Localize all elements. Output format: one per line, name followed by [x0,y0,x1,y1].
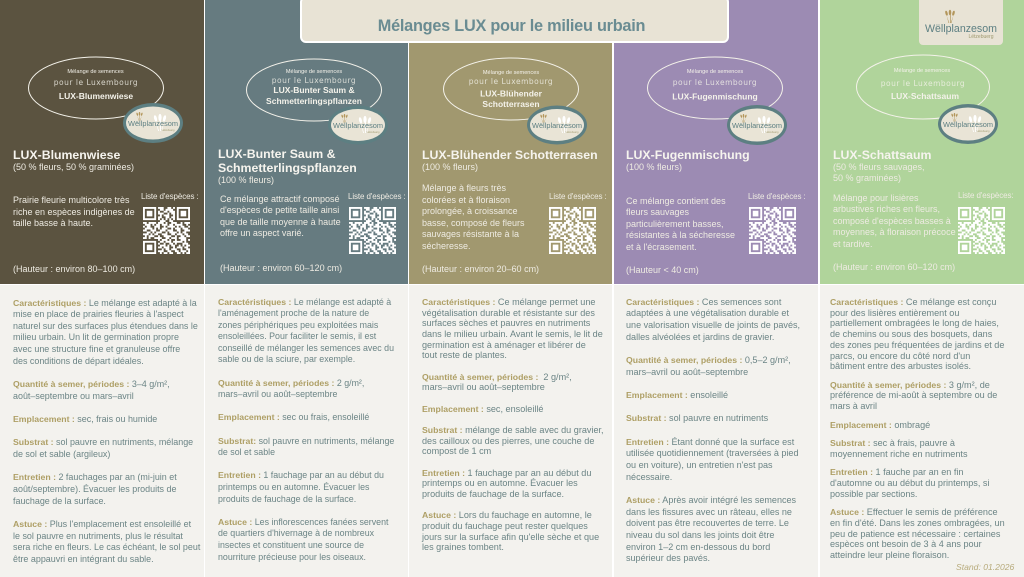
details text: de sol et sable (argileux) [13,449,110,459]
details text: milieu urbain. Un lit de germination propre [13,332,179,342]
seal: LUX-Blumenwiese ellipse and badge: Wëllplanzesom [128,119,178,128]
description [13,195,135,228]
description: Ce mélange contient des [626,196,726,206]
details text: naturel sur des surfaces plus étendues dans le [13,321,198,331]
details text: produits de fauchage de la surface. [218,494,356,504]
details text: des cailloux ou des pierres, une couche de [422,436,594,446]
details text: produit du fauchage peut rester quelques [422,521,588,531]
details text: Substrat : sec à frais, pauvre à [830,438,955,448]
details text: les graines tombent. [422,542,504,552]
description: composé d'espèces basses à [833,216,951,226]
description: sauvages résistante à la [422,229,519,239]
details text: l'aménagement proche de la nature de [218,308,369,318]
details text: insectes et constituent une source de [218,540,364,550]
seal: LUX-Blühender Schotterrasen ellipse and badge: Lëtzebuerg [566,130,579,134]
seal: LUX-Bunter Saum ellipse and badge: Mélange de semences [286,69,342,75]
heading: LUX-Blumenwiese [13,148,120,162]
details text: de sol et sable [218,447,275,457]
details text: possible par sections. [830,489,917,499]
details text: Quantité à semer, périodes : 0,5–2 g/m², [626,355,791,365]
seal: LUX-Schattsaum ellipse and badge: Wëllplanzesom [943,120,993,129]
description [422,183,525,251]
panel: LUX-Fugenmischung details [614,285,818,577]
seal: LUX-Blumenwiese ellipse and badge: LUX-Blumenwiese [59,91,133,101]
details text: fauchage de la surface. [13,496,106,506]
panel: LUX-Schattsaum details [820,285,1024,577]
seal: LUX-Bunter Saum ellipse and badge: Wëllplanzesom [333,121,383,130]
details text: ensoleillées. Pour faciliter le semis, il est [218,331,376,341]
mix ratio: 50 % graminées) [833,173,901,183]
seal: LUX-Blumenwiese ellipse and badge: Mélange de semences [67,69,124,75]
description: fleurs sauvages [626,207,689,217]
species list label: Liste d'espèces : [141,192,199,201]
details text: mars–avril ou août–septembre [626,367,748,377]
details text: germination est à aménager et libérer de [422,340,586,350]
species list label: Liste d'espèces: [958,191,1014,200]
description: et à l'écrasement. [626,242,697,252]
description: Mélange pour lisières [833,192,919,202]
description: arbustives riches en fleurs, [833,204,940,214]
height: (Hauteur : environ 60–120 cm) [220,263,342,273]
details text: préférence de mi-août à septembre ou de [830,390,997,400]
mix ratio: (50 % fleurs sauvages, [833,162,925,172]
details text: niveau du sol dans les joints doit être [626,530,774,540]
details text: Caractéristiques : Le mélange est adapté à [218,296,391,306]
details text: Substrat : mélange de sable avec du gravier, [422,425,604,435]
details text: Emplacement : ensoleillé [626,390,728,400]
description [220,194,341,238]
seal: LUX-Fugenmischung ellipse and badge: Lëtzebuerg [766,130,779,134]
details text: surfaces sèches et pauvres en nutriments [422,318,590,328]
details text: Entretien : 1 fauche par an en fin [830,467,963,477]
title: Mélanges LUX pour le milieu urbain [378,17,645,35]
description: et tardive. [833,239,873,249]
description: prolongée, à croissance [422,206,518,216]
details text: nourriture précieuse pour les oiseaux. [218,552,366,562]
description: résistantes à la sécheresse [626,230,735,240]
QR code [749,207,796,254]
details text: Entretien : 1 fauchage par an au début du [422,468,591,478]
seal: LUX-Blühender Schotterrasen ellipse and badge: Wëllplanzesom [532,121,582,130]
seal: LUX-Bunter Saum ellipse and badge [246,58,388,144]
details text: partiellement ombragées le long de haies, [830,318,999,328]
seal: LUX-Blumenwiese ellipse and badge: pour le Luxembourg [54,78,138,87]
details text: Entretien : Étant donné que la surface est [626,437,794,447]
details text: Emplacement : sec, frais ou humide [13,414,157,424]
details text: nécessaire. [626,472,672,482]
seal: LUX-Blumenwiese ellipse and badge: Lëtzebuerg [162,128,175,132]
details text: ou en voiture), un entretien n'est pas [626,460,773,470]
description: offre un aspect varié. [220,228,304,238]
details text: mars–avril ou août–septembre [218,389,337,399]
details text: Quantité à semer, périodes : 3 g/m², de [830,380,990,390]
details text: Caractéristiques : Ce mélange est conçu [830,297,996,307]
details text: parcs, ou encore du côté nord d'un [830,351,970,361]
seal: LUX-Blühender Schotterrasen ellipse and badge: pour le Luxembourg [469,77,553,86]
logo: Wëllplanzesom Lëtzebuerg [919,0,1003,45]
seal: LUX-Fugenmischung ellipse and badge: LUX-Fugenmischung [672,92,758,102]
details text: Astuce : Lors du fauchage en automne, le [422,510,592,520]
seal: LUX-Fugenmischung ellipse and badge: pour le Luxembourg [673,78,757,87]
details text: Emplacement : ombragé [830,420,930,430]
details text: Emplacement : sec ou frais, ensoleillé [218,412,369,422]
details text: sable ou de la sciure, par exemple. [218,354,355,364]
details text: dans les fissures avec un râteau, elles ne [626,507,792,517]
mix ratio: (50 % fleurs, 50 % graminées) [13,162,134,172]
details text [626,296,800,563]
mix ratio: (100 % fleurs) [422,162,478,172]
details text: végétalisation durable et résistante sur des [422,308,595,318]
panel: LUX-Fugenmischung header [614,0,818,284]
details text: jours sur la surface afin qu'elle sèche et que [422,532,599,542]
details text: Astuce : Plus l'emplacement est ensoleillé et [13,519,191,529]
details text: utilisée quotidiennement (traversées à pied [626,448,798,458]
details text [13,298,200,564]
QR code [349,207,396,254]
seal: LUX-Schattsaum ellipse and badge: Lëtzebuerg [977,129,990,133]
heading [218,147,357,175]
details text: bâtiment entre des arbustes isolés. [830,361,971,371]
seal: LUX-Fugenmischung ellipse and badge: Wëllplanzesom [732,121,782,130]
panel: LUX-Bunter Saum header [205,0,408,284]
mix ratio: (100 % fleurs) [626,162,682,172]
panel: LUX-Schattsaum header [820,0,1024,284]
seal: LUX-Schattsaum ellipse and badge: LUX-Schattsaum [891,91,959,101]
details text: tout reste de plantes. [422,350,507,360]
details text: Astuce : Effectuer le semis de préférence [830,507,998,517]
seal: LUX-Fugenmischung ellipse and badge: Mélange de semences [687,69,743,75]
details text: Quantité à semer, périodes : 2 g/m², [422,372,572,382]
seal: LUX-Blühender Schotterrasen ellipse and badge: LUX-Blühender [480,88,543,98]
height: (Hauteur : environ 60–120 cm) [833,262,955,272]
details text: compost de 1 cm [422,446,491,456]
seal: LUX-Blumenwiese ellipse and badge [28,56,183,143]
details text: printemps ou en automne. Évacuer les [218,482,369,492]
panel: LUX-Blühender Schotterrasen header [409,0,612,284]
seal: LUX-Blühender Schotterrasen ellipse and badge: Schotterrasen [482,99,540,109]
date stamp: Stand: 01.2026 [956,562,1014,572]
details text: Substrat : sol pauvre en nutriments, mélange [13,437,193,447]
QR code [549,207,596,254]
title banner [300,0,729,43]
details text: environ 1–2 cm en-dessous du bord [626,542,770,552]
seal: LUX-Bunter Saum ellipse and badge: LUX-Bunter Saum & [273,85,355,95]
details text: Quantité à semer, périodes : 3–4 g/m², [13,379,170,389]
details text: de chemins ou sous des bosquets, dans [830,329,992,339]
description: sécheresse. [422,241,471,251]
details text: sera riche en fleurs. Le cas échéant, le sol peut [13,542,200,552]
details text: en fin d'été. Dans les zones ombragées, un [830,518,1005,528]
seal: LUX-Bunter Saum ellipse and badge: pour le Luxembourg [272,76,356,85]
details text: produits de fauchage de la surface. [422,489,564,499]
details text: Caractéristiques : Le mélange est adapté à la [13,298,197,308]
seal: LUX-Schattsaum ellipse and badge [856,54,998,144]
details text: adaptées à une végétalisation durable et [626,308,789,318]
description: Prairie fleurie multicolore très [13,195,130,205]
details text: le sol pauvre en nutriments, plus le résultat [13,531,183,541]
details text: Entretien : 2 fauchages par an (mi-juin et [13,472,177,482]
panel: LUX-Blumenwiese details [0,285,204,577]
details text: supérieur des pavés. [626,553,710,563]
details text: dalles alvéolées et jardins de gravier. [626,332,774,342]
details text: Caractéristiques : Ce mélange permet une [422,297,595,307]
heading: LUX-Fugenmischung [626,148,750,162]
seal: LUX-Fugenmischung ellipse and badge [647,56,787,145]
description: taille basse à haute. [13,218,93,228]
logo: Wëllplanzesom Lëtzebuerg: Wëllplanzesom [925,23,997,35]
height: (Hauteur : environ 20–60 cm) [422,264,539,274]
description: Mélange à fleurs très [422,183,506,193]
details text: printemps ou en automne. Évacuer les [422,478,578,488]
details text: Astuce : Après avoir intégré les semences [626,495,796,505]
description: riche en espèces indigènes de [13,207,135,217]
details text: Substrat: sol pauvre en nutriments, mélange [218,436,394,446]
description [626,196,735,252]
description: basse, composé de fleurs [422,218,525,228]
seal: LUX-Blühender Schotterrasen ellipse and badge [443,58,587,144]
logo: Wëllplanzesom Lëtzebuerg: Lëtzebuerg [968,34,994,40]
details text [830,297,1005,560]
description: d'espèces de petite taille ainsi [220,205,339,215]
QR code [958,207,1005,254]
details text [422,297,604,552]
details text: conseillé de mélanger les semences avec du [218,343,394,353]
details text: Quantité à semer, périodes : 2 g/m², [218,378,364,388]
details text: Emplacement : sec, ensoleillé [422,404,543,414]
details text: mise en place de prairies fleuries à l'aspect [13,309,184,319]
details text: de quartiers d'hivernage à de nombreux [218,528,374,538]
details text: être appauvri en intégrant du sable. [13,554,154,564]
details text: mars à avril [830,401,877,411]
heading: LUX-Schattsaum [833,148,931,162]
species list label: Liste d'espèces : [549,192,607,201]
details text: avec une structure fine et granuleuse offre [13,344,180,354]
details text: des conditions de départ idéales. [13,356,144,366]
details text: espèces ont besoin de 3 à 4 ans pour [830,539,982,549]
details text: moyennement riche en nutriments [830,449,968,459]
heading: LUX-Bunter Saum & [218,147,336,161]
details text: Caractéristiques : Ces semences sont [626,296,781,306]
mix ratio [833,162,925,183]
seal: LUX-Bunter Saum ellipse and badge: Schmetterlingspflanzen [266,96,362,106]
details text: pour des lisières entièrement ou [830,308,959,318]
details text: Substrat : sol pauvre en nutriments [626,413,768,423]
description: colorées et à floraison [422,195,510,205]
species list label: Liste d'espèces : [348,192,406,201]
seal: LUX-Schattsaum ellipse and badge: Mélange de semences [894,68,950,74]
height: (Hauteur : environ 80–100 cm) [13,264,135,274]
details text: peu de patience est nécessaire : certaines [830,529,1000,539]
mix ratio: (100 % fleurs) [218,175,274,185]
panel: LUX-Blühender Schotterrasen details [409,285,612,577]
details text: Entretien : 1 fauchage par an au début du [218,470,384,480]
details text: une valorisation visuelle de joints de pavés, [626,320,800,330]
panel: LUX-Blumenwiese header [0,0,204,284]
details text: mars–avril ou août–septembre [422,382,545,392]
QR code [143,207,190,254]
details text [218,296,394,562]
seal: LUX-Blühender Schotterrasen ellipse and badge: Mélange de semences [483,70,539,76]
panel: LUX-Bunter Saum details [205,285,408,577]
description: que de taille moyenne à haute [220,217,341,227]
heading: LUX-Blühender Schotterrasen [422,148,598,162]
species list label: Liste d'espèces : [748,192,806,201]
description: Ce mélange attractif composé [220,194,340,204]
details text: d'automne ou au début du printemps, si [830,478,989,488]
details text: doivent pas être recouvertes de terre. Le [626,518,789,528]
seal: LUX-Bunter Saum ellipse and badge: Lëtzebuerg [367,130,380,134]
seal: LUX-Schattsaum ellipse and badge: pour le Luxembourg [881,79,965,88]
description: particulièrement basses, [626,219,724,229]
details text: zones périphériques peu exploitées mais [218,320,378,330]
height: (Hauteur < 40 cm) [626,265,699,275]
description [833,192,956,249]
details text: atteindre leur pleine floraison. [830,550,949,560]
details text: août/septembre). Évacuer les produits de [13,484,176,494]
heading: Schmetterlingspflanzen [218,161,357,175]
description: moyennes, à floraison précoce [833,227,956,237]
details text: dans le milieu urbain. Avant le semis, le lit de [422,329,603,339]
details text: des zones peu fréquentées de jardins et de [830,340,1004,350]
details text: août–septembre ou mars–avril [13,391,134,401]
details text: Astuce : Les inflorescences fanées servent [218,517,388,527]
